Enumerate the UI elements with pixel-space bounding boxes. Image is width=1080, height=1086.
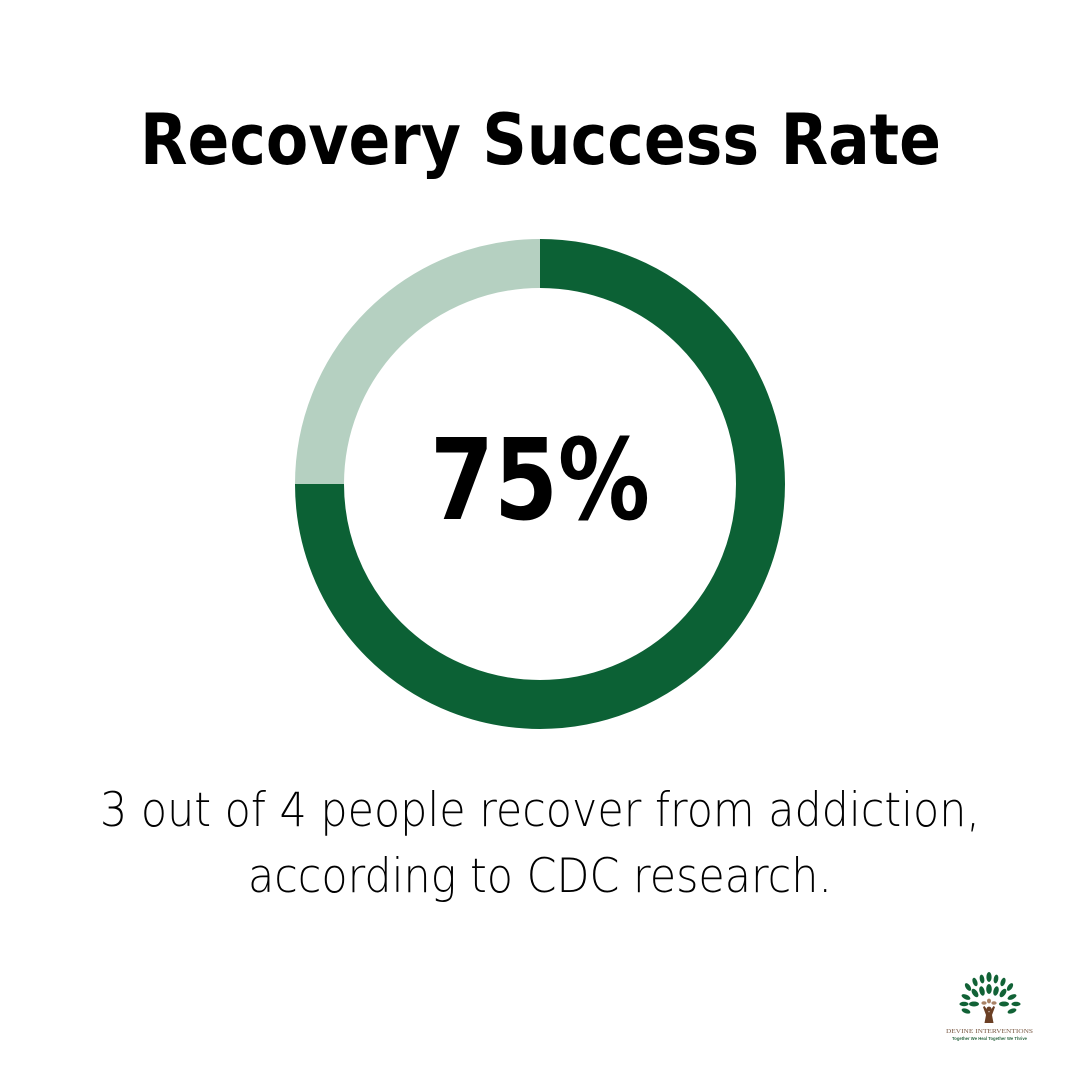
icon: tree trunk figure xyxy=(981,999,997,1023)
description line 1: 3 out of 4 people recover from addiction, xyxy=(100,783,980,838)
description text xyxy=(100,783,980,904)
donut track: remaining 25 percent xyxy=(320,264,540,484)
logo: Devine Interventions xyxy=(946,972,1033,1041)
icon: tree leaves xyxy=(959,972,1021,1015)
donut arc: 75 percent xyxy=(320,264,760,704)
logo name: DEVINE INTERVENTIONS xyxy=(946,1028,1033,1035)
description line 2: according to CDC research. xyxy=(248,849,832,904)
logo tagline: Together We Heal Together We Thrive xyxy=(952,1036,1027,1041)
center value: 75% xyxy=(430,416,650,546)
title: Recovery Success Rate xyxy=(140,99,941,181)
donut chart: 75 percent xyxy=(320,264,760,704)
